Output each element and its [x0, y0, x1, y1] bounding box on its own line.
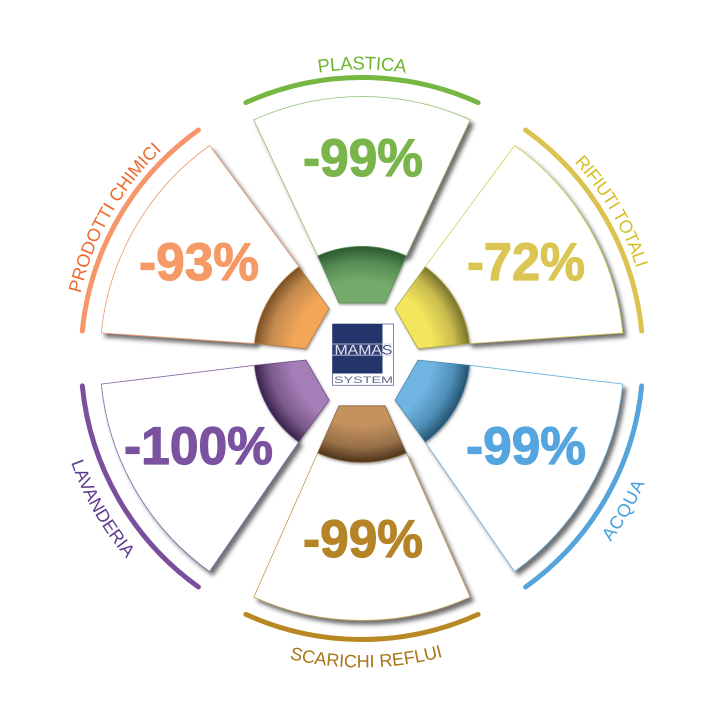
arc: scarichi reflui: [246, 614, 478, 640]
heading: acqua: ACQUA: [604, 482, 645, 542]
inner segment: plastica: [318, 246, 406, 303]
panel: rifiuti totali: [394, 128, 648, 352]
logo: MAMAS System: [332, 324, 394, 386]
arc: lavanderia: [82, 386, 198, 587]
wedge: scarichi reflui: [254, 453, 470, 620]
arc: acqua: [526, 386, 642, 587]
inner segment: rifiuti totali: [395, 267, 470, 349]
inner segment: scarichi reflui: [318, 406, 406, 462]
heading: plastica: PLASTICA: [318, 56, 406, 73]
panel: plastica: [243, 56, 481, 306]
value: acqua -99%: -99%: [466, 417, 586, 476]
value: lavanderia -100%: -100%: [124, 417, 273, 476]
panel: scarichi reflui: [243, 405, 481, 668]
heading: rifiuti totali: RIFIUTI TOTALI: [575, 155, 648, 267]
inner segment: prodotti chimici: [254, 267, 329, 349]
panel: prodotti chimici: [68, 128, 332, 352]
wedge: acqua: [425, 365, 623, 572]
wedge: lavanderia: [101, 365, 299, 572]
logo: MAMAS System: MAMA S: [334, 342, 392, 357]
arc: plastica: [246, 77, 478, 103]
inner segment: acqua: [395, 360, 470, 442]
panel: lavanderia: [72, 360, 332, 590]
value: rifiuti totali -72%: -72%: [467, 233, 585, 292]
wedge: prodotti chimici: [101, 146, 299, 344]
inner segment: lavanderia: [254, 360, 329, 442]
value: scarichi reflui -99%: -99%: [303, 510, 423, 569]
logo: MAMAS System: SYSTEM: [334, 375, 393, 386]
arc: prodotti chimici: [82, 130, 198, 331]
wedge: rifiuti totali: [425, 146, 623, 344]
panel: acqua: [394, 360, 645, 590]
arc: rifiuti totali: [526, 130, 642, 331]
heading: scarichi reflui: SCARICHI REFLUI: [290, 645, 442, 668]
value: prodotti chimici -93%: -93%: [139, 233, 259, 292]
value: plastica -99%: -99%: [303, 129, 423, 188]
heading: prodotti chimici: PRODOTTI CHIMICI: [68, 142, 161, 292]
wedge: plastica: [254, 97, 470, 256]
heading: lavanderia: LAVANDERIA: [72, 460, 133, 558]
